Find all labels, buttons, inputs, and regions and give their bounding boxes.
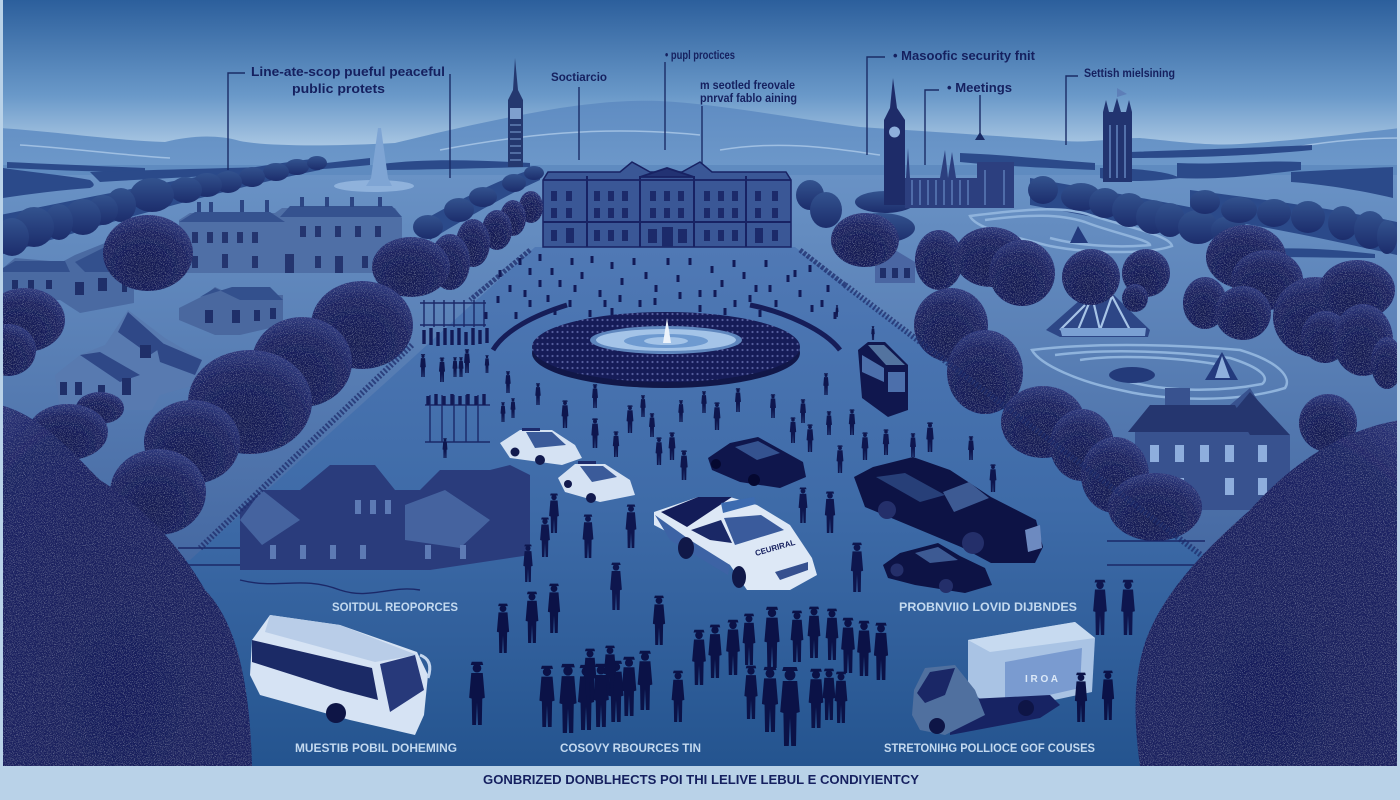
label: resources: SOITDUL REOPORCES <box>332 600 458 614</box>
double-decker bus <box>858 342 908 417</box>
manor right <box>1128 388 1290 510</box>
hedge rows: upper left <box>0 156 544 256</box>
hedge rows: upper right <box>796 176 1397 254</box>
annotation: public fable airing <box>700 80 797 172</box>
small black sedan <box>883 543 992 593</box>
central palace <box>543 162 791 247</box>
annotation: security fault: • Masoofic security fnit <box>893 48 1036 63</box>
footer caption: GONBRIZED DONBLHECTS POI THI LELIVE LEBUL E CONDIYIENTCY <box>483 773 920 787</box>
annotation: public practices: • pupl proctices <box>665 50 735 62</box>
right clock tower and parliament <box>884 78 1014 208</box>
left clock tower <box>508 58 523 167</box>
annotation: peaceful protests <box>228 64 450 178</box>
police car small upper <box>500 428 582 465</box>
annotation: scenario <box>551 70 607 160</box>
manor mid left <box>179 287 283 335</box>
label: public policing: MUESTIB POBIL DOHEMING <box>295 741 457 755</box>
black limousine <box>854 457 1043 563</box>
small house far left <box>3 243 134 313</box>
box truck: I R O A <box>1025 674 1058 685</box>
footer strip <box>0 766 1400 800</box>
annotation: meetings: • Meetings <box>947 80 1012 95</box>
police officers: front groups <box>469 584 1114 746</box>
sky <box>0 0 1400 160</box>
far right tower with flag <box>1103 88 1132 182</box>
annotation: scenario: Soctiarcio <box>551 70 607 84</box>
label: stretching police: STRETONIHG POLLIOCE GOF COUSES <box>884 741 1095 755</box>
distant tiny crowd <box>486 254 835 319</box>
far hedges <box>0 145 1397 258</box>
annotation: security fault <box>867 48 1036 155</box>
annotation: scottish meetings: Settish mielsining <box>1084 66 1175 80</box>
large trees foreground left <box>0 405 252 766</box>
label: provided: PROBNVIIO LOVID DIJBNDES <box>899 600 1077 614</box>
crowd by left fence <box>424 328 487 405</box>
dark saloon car <box>708 437 806 488</box>
large police car <box>654 497 817 590</box>
box truck <box>912 622 1095 735</box>
barrier fences <box>178 250 1205 594</box>
far hills <box>0 101 1400 240</box>
annotation: public fable airing: m seotled freovale <box>700 80 795 92</box>
right lawn ripples <box>970 209 1287 399</box>
obelisk monument <box>334 128 414 192</box>
tents on right lawn <box>1046 226 1238 380</box>
annotation: scottish meetings <box>1066 66 1175 145</box>
annotation: public practices <box>665 50 735 150</box>
small house right <box>875 250 915 283</box>
annotation: peaceful protests: public protets <box>292 81 385 96</box>
large trees foreground right <box>1136 420 1400 766</box>
police car small lower <box>558 461 635 503</box>
lawns <box>0 165 1400 595</box>
large police car: CEURIRAL <box>754 538 796 558</box>
white coach bus <box>250 615 430 735</box>
plaza ground <box>0 247 1400 766</box>
trees: mid left cluster <box>0 191 543 535</box>
small hedge on right lawn <box>1109 367 1155 383</box>
fountain crowd ring <box>493 305 840 388</box>
left manor <box>179 197 402 273</box>
annotation: public fable airing: pnrvaf fablo aining <box>700 93 797 105</box>
label: costly resources: COSOVY RBOURCES TIN <box>560 741 701 755</box>
trees: mid right cluster <box>831 213 1400 541</box>
annotation: peaceful protests: Line-ate-scop pueful peaceful <box>251 64 445 79</box>
cottage left <box>55 310 202 410</box>
dark estate lower left <box>240 465 530 570</box>
police officers: mid plaza <box>420 305 1135 635</box>
annotation: meetings <box>925 80 1012 165</box>
